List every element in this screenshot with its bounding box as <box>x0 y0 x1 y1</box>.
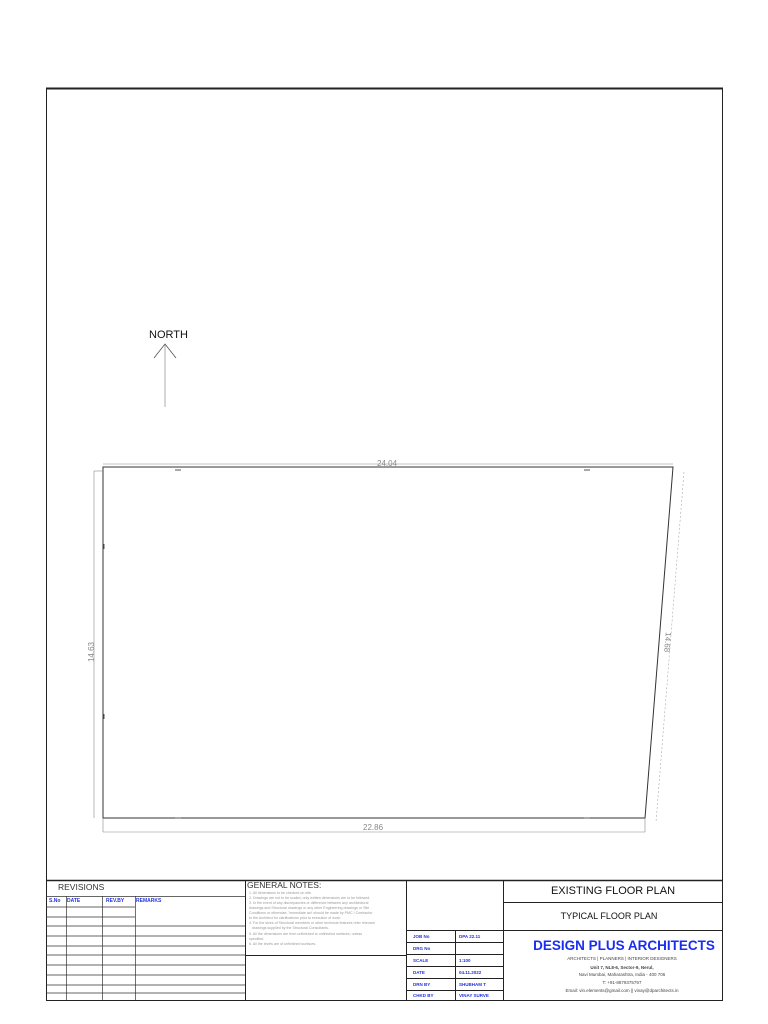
dimension labels <box>87 459 673 832</box>
drawing info table: SCALE <box>413 958 428 963</box>
dimension labels: 14.63 <box>87 641 96 662</box>
general notes: to the Architect for clarifications prior to execution of work. <box>249 916 341 920</box>
firm details <box>533 938 715 993</box>
drawing info table <box>413 934 489 998</box>
dimension labels: 22.86 <box>363 823 384 832</box>
general notes: 4. For the sizes of Structural members or other technical features refer relevant <box>249 921 375 925</box>
north arrow <box>149 329 188 407</box>
general notes: Conditions or otherwise, 'immediate act' should be made by PMC / Contractor <box>249 911 373 915</box>
general notes <box>247 880 375 946</box>
revisions table: REV.BY <box>106 898 125 904</box>
firm details: DESIGN PLUS ARCHITECTS <box>533 938 715 953</box>
drawing info table: 1:100 <box>459 958 471 963</box>
general notes: specified. <box>249 937 264 941</box>
general notes: 3. In the event of any discrepancies or difference between any architectural <box>249 901 369 905</box>
drawing info table: VINAY SURVE <box>459 993 489 998</box>
drawing info table: SHUBHAM T <box>459 982 486 987</box>
revisions table <box>46 882 245 1000</box>
revisions table: S.No <box>49 898 60 904</box>
drawing info table: JOB No <box>413 934 430 939</box>
firm details: T: +91-8879375797 <box>603 980 642 985</box>
general notes: drawings and Structural drawings or any other Engineering drawings or Site <box>249 906 369 910</box>
general notes: 5. All the dimensions are from unfinished to unfinished surfaces, unless <box>249 932 362 936</box>
floor plan outline <box>87 459 684 832</box>
drawing info table: DRN BY <box>413 982 430 987</box>
title block <box>46 880 723 1000</box>
general notes: drawings supplied by the Structural Consultants. <box>252 926 329 930</box>
firm details: Unit 7, NL8-6, Sector-9, Nerul, <box>590 965 654 970</box>
revisions table: REMARKS <box>136 898 162 904</box>
dimension labels: 14.68 <box>662 632 673 653</box>
firm details: ARCHITECTS | PLANNERS | INTERIOR DESIGNERS <box>567 956 677 961</box>
drawing info table: DATE <box>413 970 425 975</box>
revisions table: DATE <box>67 898 81 904</box>
drawing titles: EXISTING FLOOR PLAN <box>551 885 675 897</box>
drawing info table: DRG No <box>413 946 430 951</box>
firm details: Navi Mumbai, Maharashtra, India - 400 706 <box>579 972 666 977</box>
general notes: 1. All dimensions to be checked on site. <box>249 891 312 895</box>
general notes: GENERAL NOTES: <box>247 880 321 890</box>
sheet frame <box>46 88 723 1000</box>
north arrow: NORTH <box>149 329 188 341</box>
dimension labels: 24.04 <box>377 459 398 468</box>
drawing info table: DPA 22.11 <box>459 934 481 939</box>
drawing titles: TYPICAL FLOOR PLAN <box>561 911 657 921</box>
drawing titles <box>551 885 675 921</box>
drawing info table: 04.11.2022 <box>459 970 482 975</box>
drawing info table: CHKD BY <box>413 993 434 998</box>
firm details: Email: vin.elements@gmail.com || vinay@dparchitects.in <box>565 988 679 993</box>
revisions table: REVISIONS <box>58 882 105 892</box>
general notes: 6. All the levels are of unfinished surfaces. <box>249 942 316 946</box>
general notes: 2. Drawings are not to be scaled, only written dimensions are to be followed. <box>249 896 370 900</box>
